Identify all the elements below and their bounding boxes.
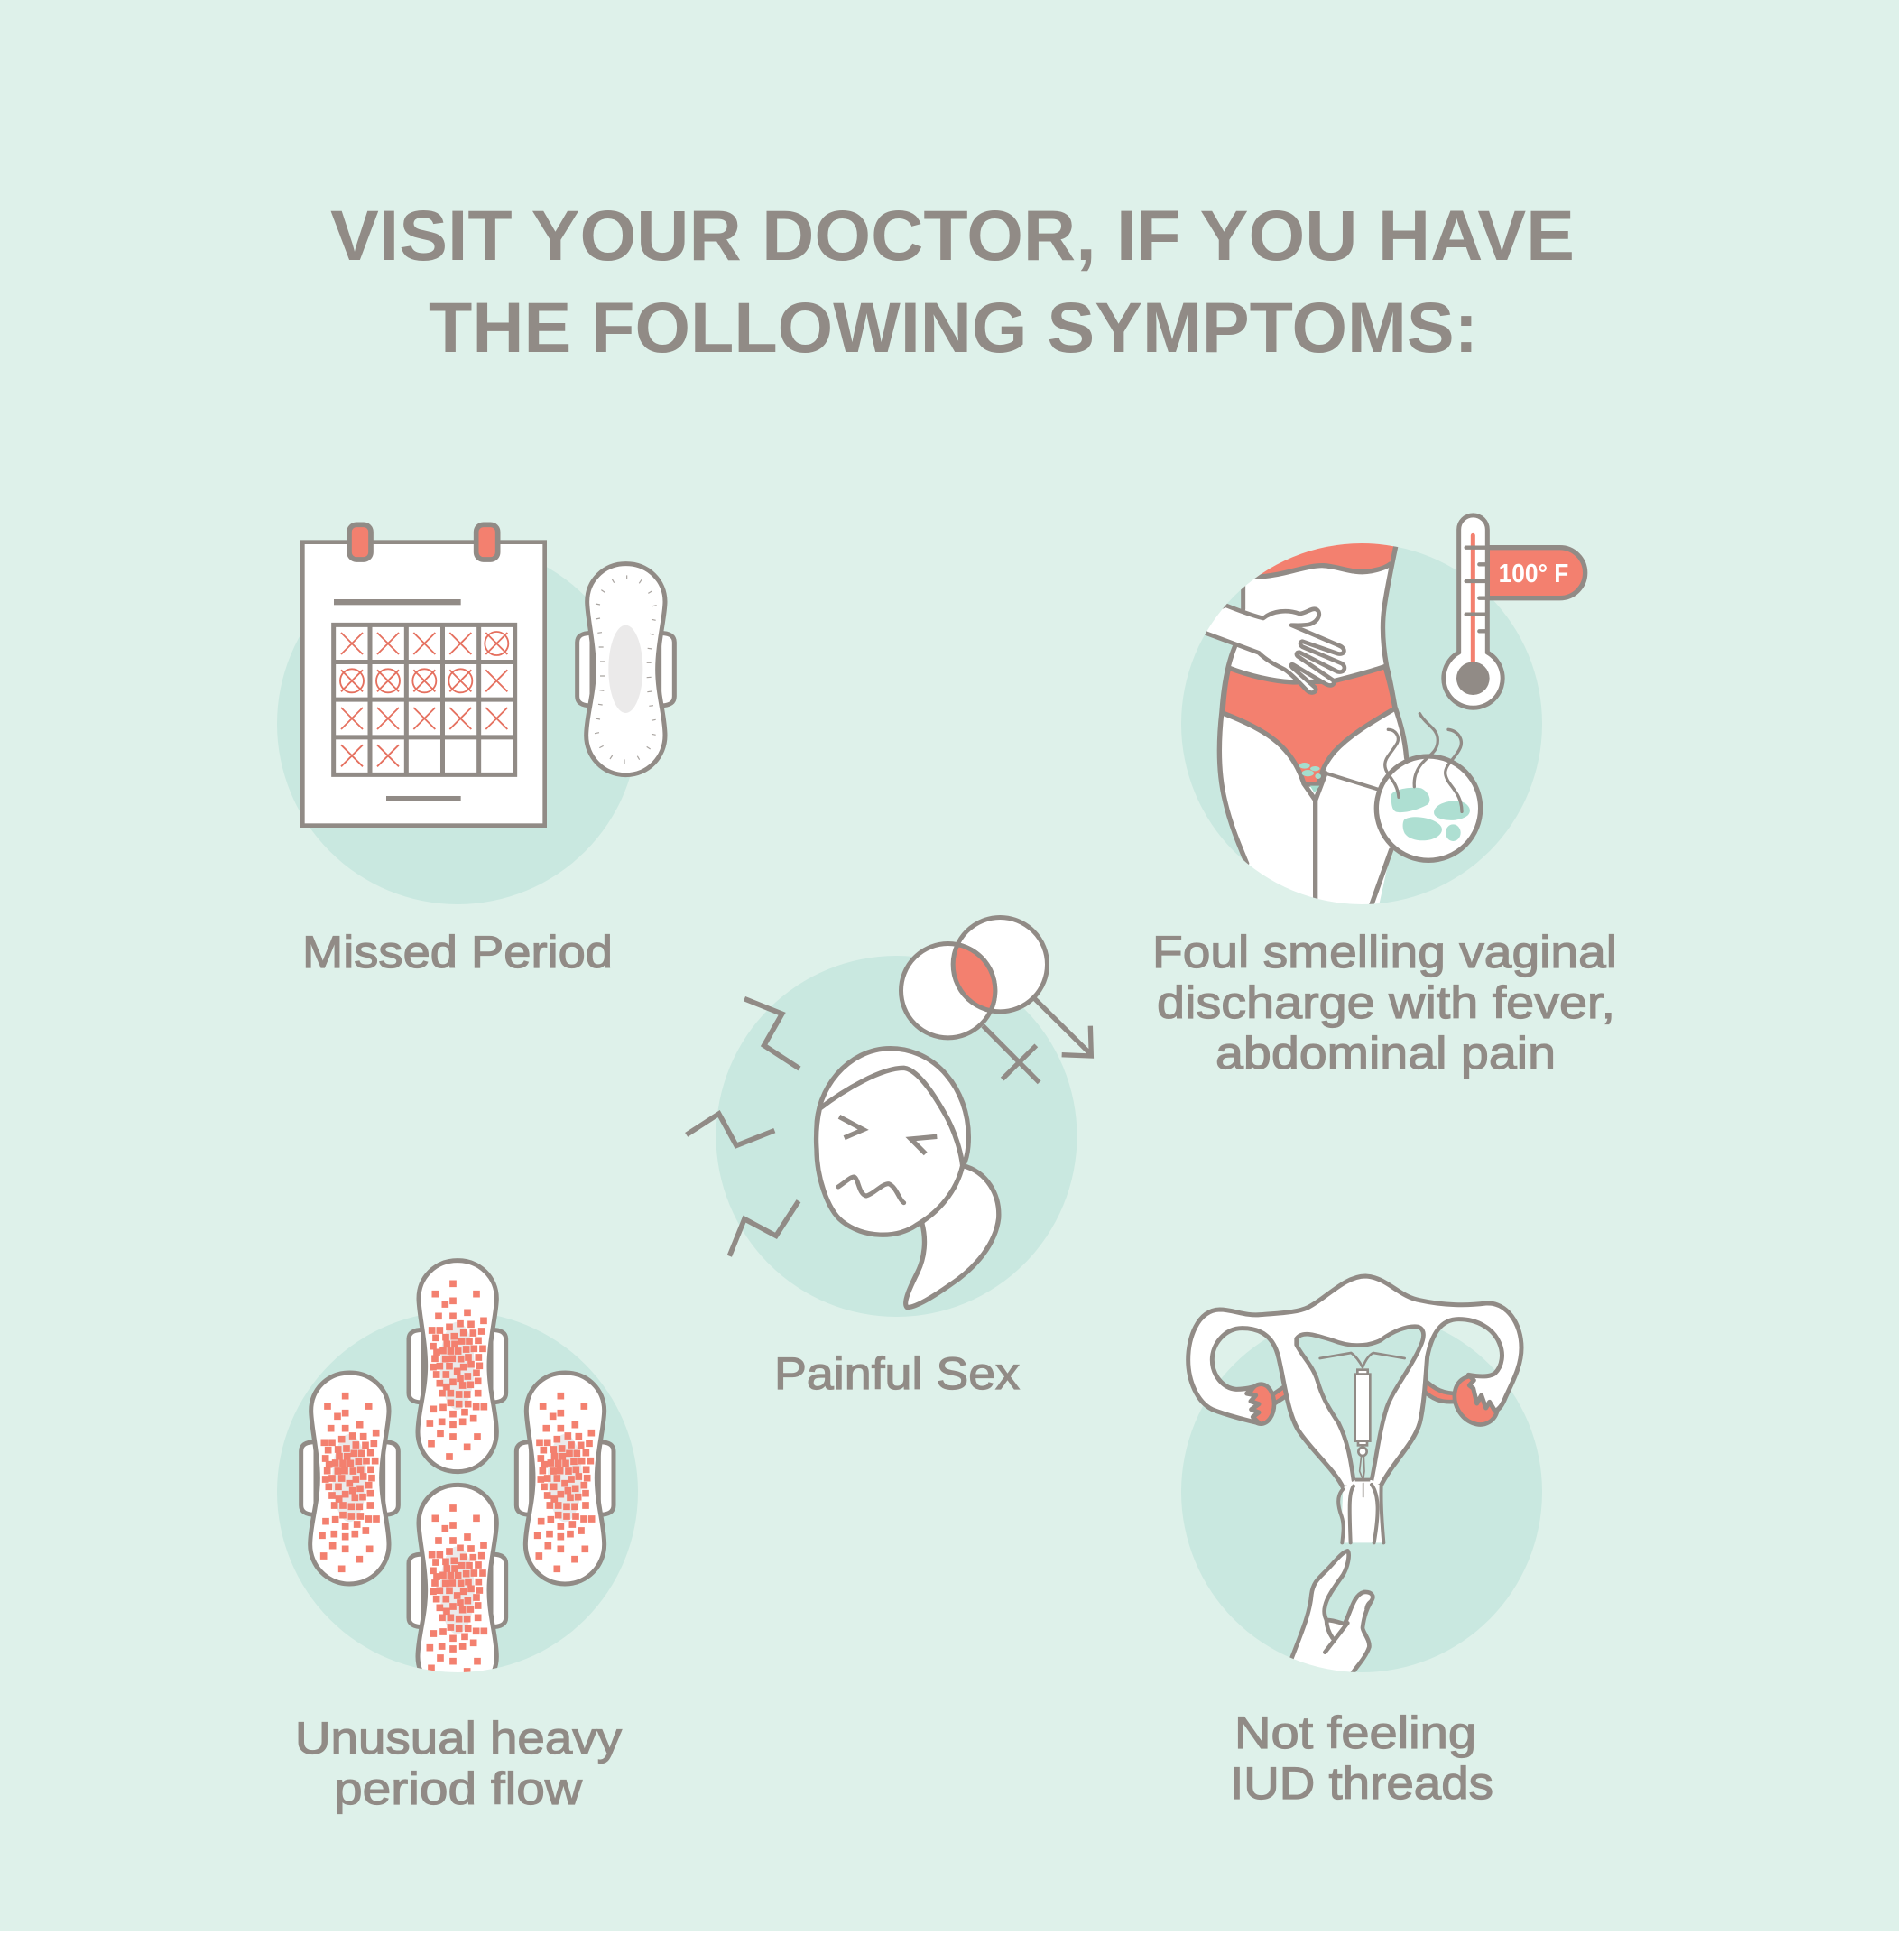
title: VISIT YOUR DOCTOR, IF YOU HAVE: [330, 195, 1575, 275]
icon: left pad: [301, 1373, 398, 1584]
icon: uterus and fallopian tubes: [1188, 1276, 1521, 1487]
label: missed period: Missed Period: [302, 927, 613, 977]
label: not feeling IUD threads: IUD threads: [1230, 1758, 1493, 1809]
icon: ovaries and ligaments: [1248, 1368, 1507, 1432]
icon: woman's face in pain: [817, 1049, 999, 1307]
illustration: four soaked pads: [301, 1261, 614, 1696]
label: foul smelling discharge: abdominal pain: [1215, 1028, 1556, 1079]
panel: painful sex: [687, 917, 1091, 1399]
icon: magnified discharge: [1376, 714, 1481, 860]
icon: cervix and vaginal canal: [1338, 1480, 1385, 1542]
panel: unusual heavy period flow: [277, 1261, 638, 1814]
illustration: pained face, gender symbols, pain bolts: [687, 917, 1091, 1307]
icon: bottom pad: [409, 1485, 506, 1696]
icon: calendar: [302, 524, 545, 826]
background circle: [716, 956, 1077, 1317]
background circle: [277, 1311, 638, 1672]
background circle: [1181, 543, 1542, 904]
panel: not feeling IUD threads: [1181, 1276, 1542, 1809]
icon: thermometer with 100 F flag: 100° F: [1499, 560, 1568, 588]
label: painful sex: Painful Sex: [774, 1348, 1020, 1399]
icon: intersecting gender symbols: [901, 917, 1091, 1082]
icon: IUD: [1320, 1353, 1405, 1497]
connector line to magnifier: [1326, 773, 1379, 790]
icon: top pad: [409, 1261, 506, 1472]
panel: missed period: [277, 524, 674, 977]
icon: calendar and sanitary pad: [302, 524, 674, 826]
panel: foul smelling discharge with fever: [1152, 515, 1617, 1079]
icon: sanitary pad: [578, 564, 674, 775]
icon: hand reaching for threads: [1288, 1551, 1373, 1679]
background circle: [277, 543, 638, 904]
title: THE FOLLOWING SYMPTOMS:: [429, 287, 1478, 367]
label: not feeling IUD threads: Not feeling: [1234, 1708, 1476, 1758]
label: foul smelling discharge: Foul smelling vaginal: [1152, 927, 1617, 977]
background circle: [1181, 1311, 1542, 1672]
illustration: torso with underwear and hand: [1205, 543, 1410, 904]
label: heavy period flow: Unusual heavy: [295, 1713, 622, 1764]
illustration: uterus, IUD and hand: [1188, 1276, 1521, 1679]
illustration: body, thermometer, magnified discharge: [1205, 513, 1588, 904]
label: foul smelling discharge: discharge with fever,: [1157, 977, 1615, 1028]
icon: thermometer with 100 F flag: [1444, 515, 1585, 708]
icon: uterine cavity: [1297, 1327, 1423, 1480]
title: [330, 195, 1575, 367]
icon: pain bolts: [687, 999, 799, 1256]
icon: right pad: [516, 1373, 614, 1584]
label: heavy period flow: period flow: [334, 1764, 583, 1814]
